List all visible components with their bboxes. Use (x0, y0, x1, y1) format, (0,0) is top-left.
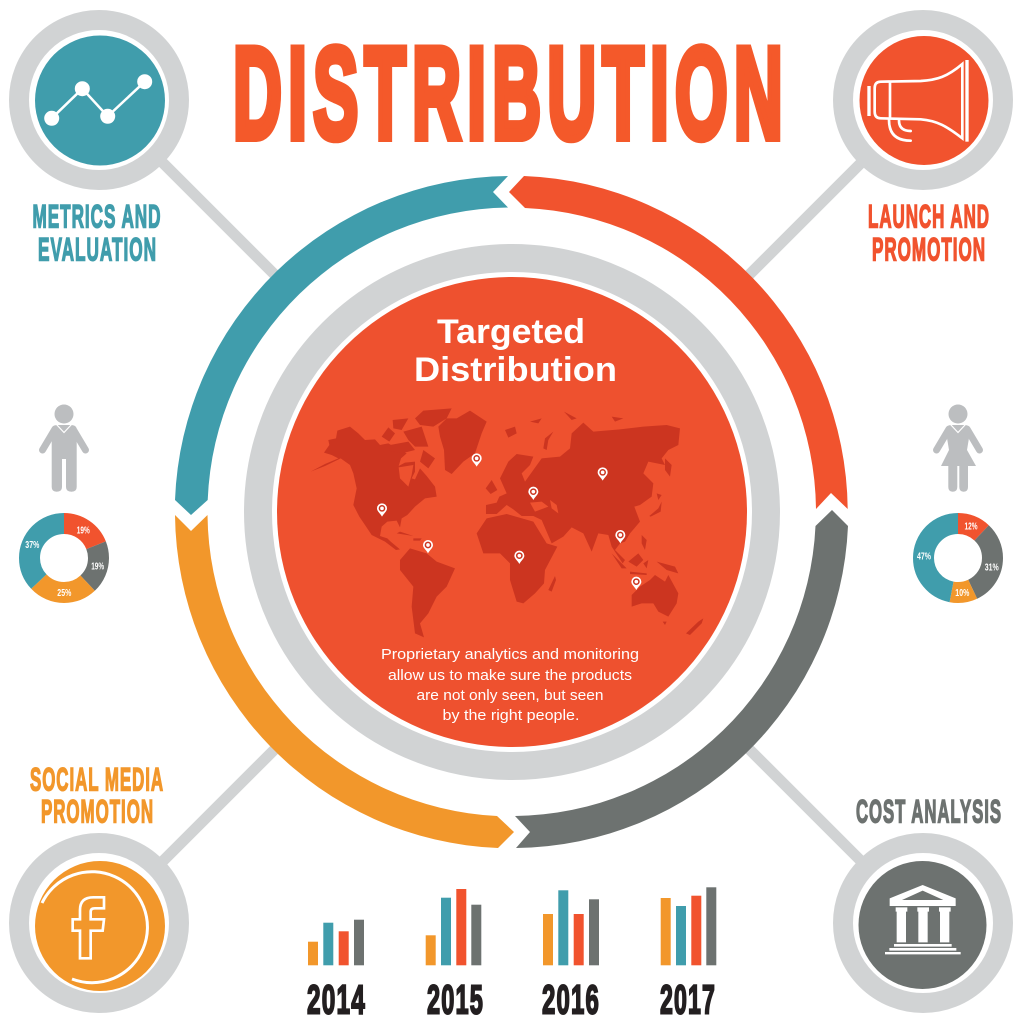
corner node: cost analysis (843, 843, 1003, 1003)
body text: allow us to make sure the products (388, 667, 632, 684)
connector lines (150, 150, 874, 874)
bar chart: 2017 (660, 887, 716, 1022)
donut: female audience: 31% (985, 562, 999, 574)
location pins (377, 453, 641, 590)
corner node: metrics and evaluation (19, 20, 179, 180)
bar chart: 2016: 2016 (542, 976, 600, 1022)
bar chart: 2014 (307, 920, 366, 1022)
heading: targeted distribution (414, 313, 617, 389)
label: social media promotion (30, 762, 164, 830)
body text: by the right people. (442, 707, 580, 724)
arc: launch and promotion (509, 176, 848, 509)
body text: Proprietary analytics and monitoring (381, 646, 639, 663)
icon: facebook f (73, 897, 104, 958)
icon: megaphone (867, 60, 969, 142)
label: metrics and evaluation: EVALUATION (38, 232, 157, 268)
donut: female audience: 10% (955, 588, 969, 599)
arc: cost analysis (515, 510, 848, 848)
process ring (175, 176, 848, 848)
bar chart: 2016 (542, 890, 600, 1022)
red disc (277, 277, 747, 747)
corner node: social media promotion (19, 843, 179, 1003)
bar chart: 2015: 2015 (427, 976, 484, 1022)
arc: metrics and evaluation (175, 176, 508, 515)
arc: social media promotion (175, 515, 514, 848)
bar chart: 2015 (426, 889, 484, 1022)
body text (381, 646, 639, 724)
label: launch and promotion (868, 198, 990, 268)
icon: line chart (44, 74, 152, 126)
bar chart: 2014: 2014 (307, 976, 366, 1022)
donut: male audience: 19% (91, 562, 104, 572)
world map (311, 408, 703, 637)
label: social media promotion: PROMOTION (41, 794, 154, 830)
donut: female audience (917, 522, 999, 599)
bar chart: 2017: 2017 (660, 976, 716, 1022)
label: metrics and evaluation (32, 198, 162, 268)
donut: male audience: 19% (77, 526, 90, 536)
donut: male audience: 37% (25, 540, 39, 551)
donut: female audience: 12% (964, 522, 978, 532)
body text: are not only seen, but seen (416, 687, 604, 704)
icon: bank building (885, 885, 961, 954)
label: metrics and evaluation: METRICS AND (32, 198, 162, 234)
donut: male audience: 25% (57, 588, 71, 599)
corner node: launch and promotion (843, 20, 1003, 180)
icon: male figure (42, 404, 86, 492)
donut: male audience (25, 524, 104, 599)
outer grey ring (258, 258, 766, 766)
heading: targeted distribution: Targeted (437, 313, 585, 351)
icon: female figure (936, 404, 980, 492)
label: social media promotion: SOCIAL MEDIA (30, 762, 164, 798)
donut: female audience: 47% (917, 552, 931, 562)
heading: targeted distribution: Distribution (414, 351, 617, 389)
central panel (258, 258, 766, 766)
